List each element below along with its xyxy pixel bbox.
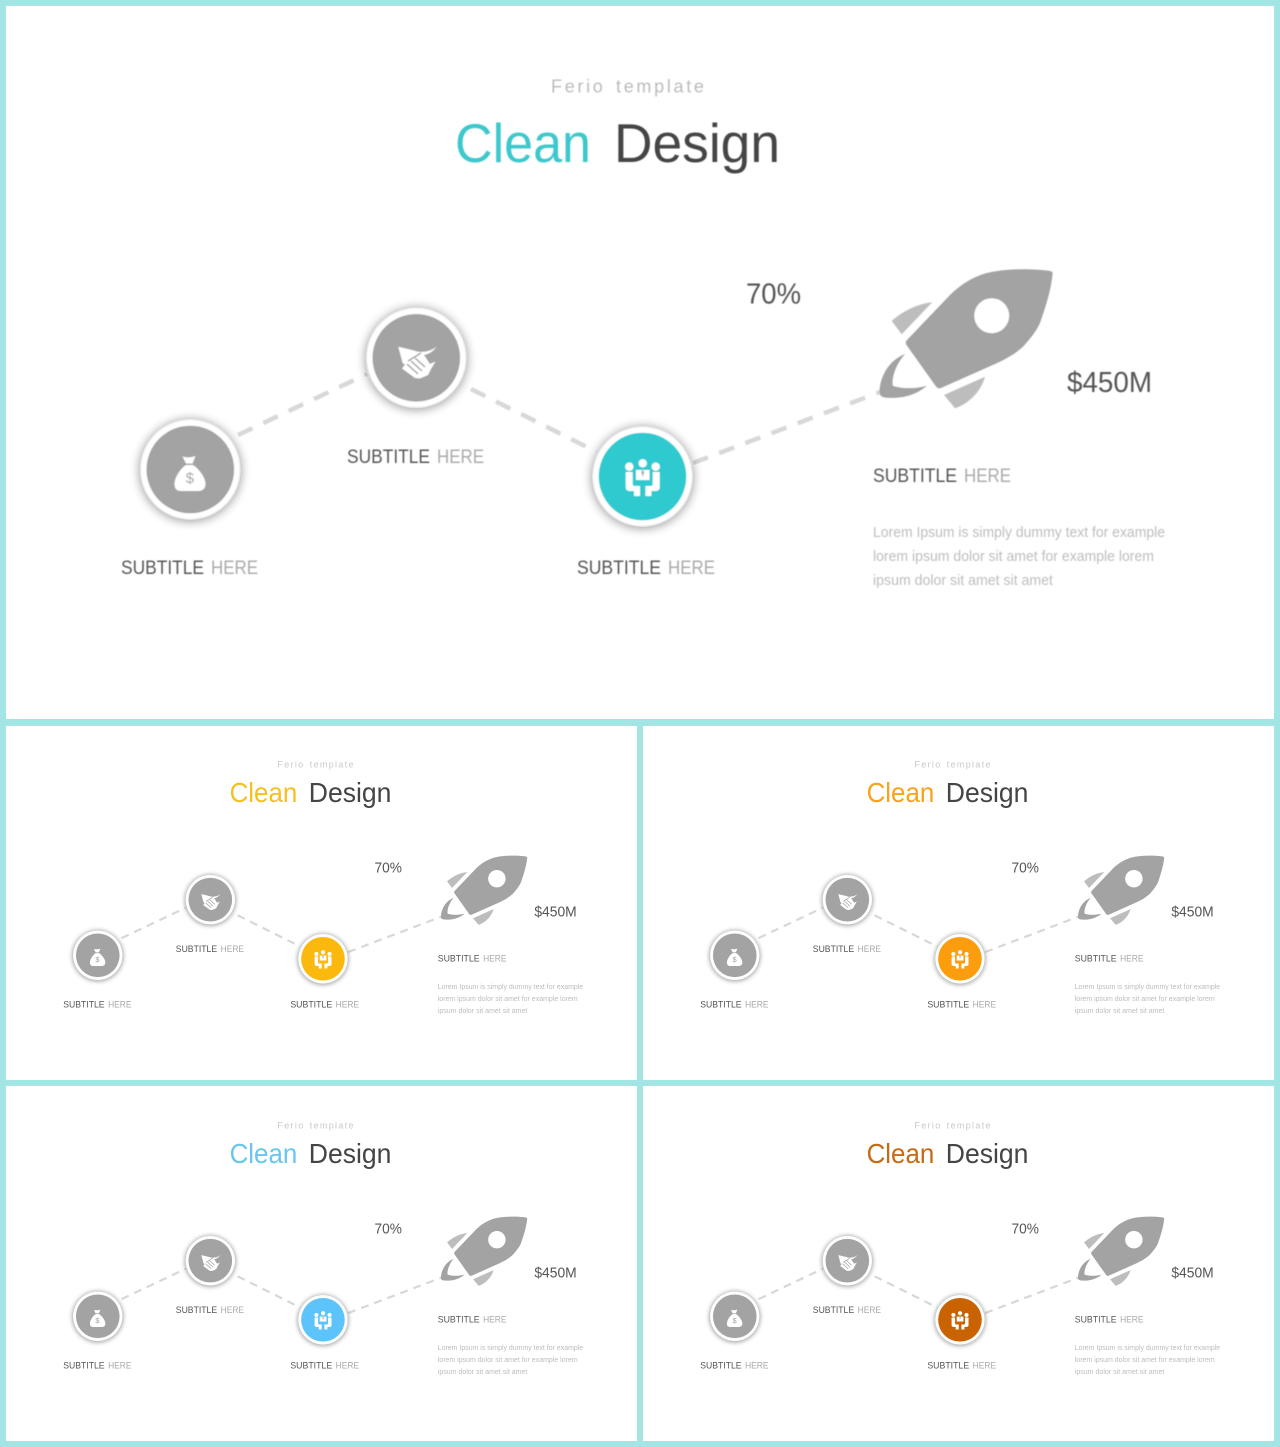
labels: HERE [336, 1360, 359, 1371]
body text [438, 1343, 583, 1376]
body text: lorem ipsum dolor sit amet for example lorem [438, 994, 578, 1003]
title: Design [309, 777, 391, 808]
label: subtitle one: SUBTITLE [121, 558, 204, 579]
panel: small slide blue [6, 1086, 637, 1441]
icon: rocket [441, 856, 527, 925]
labels: HERE [336, 999, 359, 1010]
icon: rocket [1078, 1217, 1164, 1286]
labels: HERE [973, 999, 996, 1010]
labels: HERE [1120, 954, 1143, 965]
node: money bag [72, 1291, 123, 1342]
title [230, 777, 391, 808]
labels: HERE [745, 1360, 768, 1371]
body text: ipsum dolor sit amet sit amet [1075, 1367, 1164, 1376]
title [230, 1138, 391, 1169]
stat: 70%: 70% [1012, 1222, 1039, 1238]
stat: $450M: $450M [1171, 1266, 1214, 1282]
labels: SUBTITLE [63, 1360, 105, 1371]
heading: template [947, 1121, 992, 1131]
stat: 70%: 70% [1012, 861, 1039, 877]
node: money bag: $ [95, 1316, 100, 1325]
labels: HERE [221, 944, 244, 955]
labels [63, 944, 506, 1010]
body text [873, 525, 1165, 589]
labels: HERE [858, 944, 881, 955]
dashed connector line [122, 908, 441, 952]
title [867, 777, 1028, 808]
stat: $450M: $450M [534, 1266, 577, 1282]
icon: rocket [879, 269, 1053, 408]
node: handshake [185, 875, 236, 926]
body text: Lorem Ipsum is simply dummy text for example [1075, 1343, 1220, 1352]
heading: Ferio template: template [616, 76, 707, 96]
body text: ipsum dolor sit amet sit amet [1075, 1006, 1164, 1015]
labels: SUBTITLE [176, 944, 217, 955]
node: money bag [72, 930, 123, 981]
label: subtitle three [577, 558, 715, 579]
body text: lorem ipsum dolor sit amet for example lorem [1075, 994, 1215, 1003]
labels: SUBTITLE [290, 999, 332, 1010]
body text [438, 982, 583, 1015]
node: people highlighted [298, 1295, 348, 1346]
labels: HERE [1120, 1315, 1143, 1326]
label: subtitle one [121, 558, 258, 579]
node: handshake [185, 1236, 236, 1287]
slide content [700, 1121, 1220, 1376]
labels: HERE [745, 999, 768, 1010]
body text [1075, 982, 1220, 1015]
heading: Ferio template: Ferio [551, 76, 606, 96]
labels: SUBTITLE [927, 999, 969, 1010]
dashed connector line [238, 374, 880, 463]
title [867, 1138, 1028, 1169]
labels [700, 944, 1143, 1010]
stat: $450M: $450M [1171, 905, 1214, 921]
body text [1075, 1343, 1220, 1376]
labels: HERE [858, 1305, 881, 1316]
node: money bag [709, 930, 760, 981]
labels: SUBTITLE [176, 1305, 217, 1316]
heading: Ferio [914, 760, 942, 770]
body text: lorem ipsum dolor sit amet for example lorem [873, 549, 1154, 565]
node: handshake [822, 875, 873, 926]
label: subtitle three: HERE [668, 558, 715, 579]
heading: template [310, 760, 355, 770]
labels: SUBTITLE [1075, 954, 1117, 965]
body text: lorem ipsum dolor sit amet for example lorem [438, 1355, 578, 1364]
label: subtitle four [873, 466, 1011, 487]
labels: SUBTITLE [700, 1360, 742, 1371]
node: people highlighted [935, 1295, 985, 1346]
node: handshake [822, 1236, 873, 1287]
heading: Ferio [277, 1121, 305, 1131]
title: Design [309, 1138, 391, 1169]
labels: SUBTITLE [700, 999, 742, 1010]
labels: HERE [108, 1360, 131, 1371]
slide content [121, 76, 1165, 589]
icon: rocket [1078, 856, 1164, 925]
slide content [63, 760, 583, 1015]
labels: SUBTITLE [438, 954, 480, 965]
node: money bag: $ [732, 955, 737, 964]
label: subtitle three: SUBTITLE [577, 558, 661, 579]
title: Clean [867, 1138, 934, 1169]
slide content [63, 1121, 583, 1376]
title: Clean Design: Clean [455, 112, 591, 174]
labels: HERE [483, 1315, 506, 1326]
stat: 70%: 70% [746, 278, 801, 310]
stat: $450M: $450M [1067, 367, 1152, 399]
stat: 70%: 70% [375, 861, 402, 877]
labels: SUBTITLE [438, 1315, 480, 1326]
title: Design [946, 777, 1028, 808]
body text: lorem ipsum dolor sit amet for example lorem [1075, 1355, 1215, 1364]
body text: ipsum dolor sit amet sit amet [438, 1367, 527, 1376]
body text: ipsum dolor sit amet sit amet [438, 1006, 527, 1015]
heading: Ferio [277, 760, 305, 770]
node: money bag: $ [186, 470, 195, 487]
labels: SUBTITLE [1075, 1315, 1117, 1326]
panel: small slide yellow [6, 726, 637, 1080]
panel: small slide orange [643, 726, 1274, 1080]
title: Clean Design [455, 112, 780, 174]
labels: HERE [221, 1305, 244, 1316]
heading: template [310, 1121, 355, 1131]
node: money bag [709, 1291, 760, 1342]
body text: Lorem Ipsum is simply dummy text for example [438, 1343, 583, 1352]
labels: HERE [108, 999, 131, 1010]
node: money bag [139, 420, 241, 522]
node: handshake [365, 308, 467, 410]
body text: ipsum dolor sit amet sit amet [873, 573, 1053, 589]
title: Clean [230, 777, 297, 808]
title: Clean Design: Design [614, 112, 780, 174]
labels [700, 1305, 1143, 1371]
panel: main slide teal [6, 6, 1274, 719]
label: subtitle two: SUBTITLE [347, 447, 430, 468]
heading: template [947, 760, 992, 770]
body text: Lorem Ipsum is simply dummy text for example [438, 982, 583, 991]
label: subtitle one: HERE [211, 558, 258, 579]
stat: 70%: 70% [375, 1222, 402, 1238]
labels: SUBTITLE [927, 1360, 969, 1371]
label: subtitle four: HERE [964, 466, 1011, 487]
node: money bag: $ [95, 955, 100, 964]
icon: rocket [441, 1217, 527, 1286]
stat: $450M: $450M [534, 905, 577, 921]
label: subtitle four: SUBTITLE [873, 466, 957, 487]
labels: HERE [973, 1360, 996, 1371]
slide content [700, 760, 1220, 1015]
node: people highlighted [298, 934, 348, 985]
labels: SUBTITLE [63, 999, 105, 1010]
label: subtitle two: HERE [437, 447, 484, 468]
label: subtitle two [347, 447, 484, 468]
heading: Ferio [914, 1121, 942, 1131]
body text: Lorem Ipsum is simply dummy text for example [1075, 982, 1220, 991]
node: people highlighted [935, 934, 985, 985]
labels [63, 1305, 506, 1371]
labels: SUBTITLE [813, 944, 854, 955]
title: Clean [867, 777, 934, 808]
dashed connector line [759, 1269, 1078, 1313]
title: Design [946, 1138, 1028, 1169]
labels: HERE [483, 954, 506, 965]
panel: small slide brown [643, 1086, 1274, 1441]
node: people highlighted [592, 426, 694, 528]
node: money bag: $ [732, 1316, 737, 1325]
body text: Lorem Ipsum is simply dummy text for example [873, 525, 1165, 541]
labels: SUBTITLE [813, 1305, 854, 1316]
dashed connector line [122, 1269, 441, 1313]
dashed connector line [759, 908, 1078, 952]
labels: SUBTITLE [290, 1360, 332, 1371]
title: Clean [230, 1138, 297, 1169]
